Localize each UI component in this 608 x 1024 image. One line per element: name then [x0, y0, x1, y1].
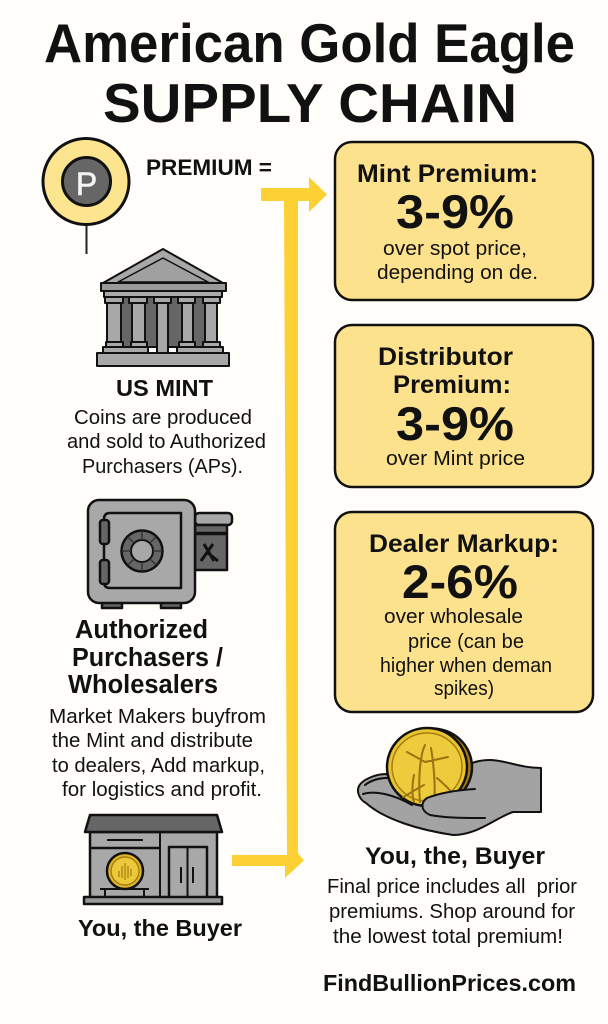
text: final price note: the lowest total premium!	[333, 925, 563, 948]
text: wholesalers description	[49, 705, 266, 801]
label: You, the Buyer (left): You, the Buyer	[78, 915, 242, 941]
label: You, the Buyer (right): You, the, Buyer	[365, 843, 545, 870]
icon: storefront with coin	[84, 815, 222, 904]
panel: mint premium: depending on de.	[377, 261, 538, 284]
panel: distributor premium: Premium:	[393, 371, 511, 399]
text: wholesalers description: the Mint and distribute	[52, 729, 253, 752]
text: US Mint description	[67, 406, 266, 478]
icon: hand holding gold coin	[358, 728, 541, 835]
arrow: top connector to mint premium	[261, 177, 327, 860]
panel: dealer markup: Dealer Markup:	[369, 530, 559, 558]
panel: mint premium: 3-9%	[396, 185, 514, 238]
text: wholesalers description: for logistics and profit.	[62, 778, 262, 801]
panel: mint premium: Mint Premium:	[357, 160, 538, 188]
premium label: PREMIUM =	[146, 155, 272, 180]
heading: US Mint: US MINT	[116, 375, 213, 401]
panel: dealer markup	[335, 512, 593, 712]
text: US Mint description: Coins are produced	[74, 406, 252, 429]
icon: premium P badge: P	[76, 166, 97, 202]
heading: Authorized Purchasers / Wholesalers	[68, 616, 223, 699]
text: final price note: premiums. Shop around for	[329, 900, 575, 923]
text: final price note: Final price includes all prior	[327, 875, 577, 898]
panel: dealer markup: price (can be	[408, 630, 524, 653]
panel: dealer markup: over wholesale	[384, 605, 523, 628]
panel: dealer markup: higher when deman	[380, 654, 552, 677]
panel: mint premium: over spot price,	[383, 237, 527, 260]
panel: distributor premium	[335, 325, 593, 487]
text: US Mint description: Purchasers (APs).	[82, 455, 243, 478]
text: wholesalers description: to dealers, Add markup,	[52, 754, 265, 777]
text: final price note	[327, 875, 577, 948]
panel: distributor premium: Distributor	[378, 343, 513, 371]
panel: distributor premium: 3-9%	[396, 397, 514, 450]
icon: vault safe	[88, 500, 232, 608]
title	[44, 12, 575, 134]
icon: US Mint building	[97, 249, 229, 366]
panel: dealer markup: 2-6%	[402, 555, 518, 608]
footer: website: FindBullionPrices.com	[323, 970, 576, 996]
text: wholesalers description: Market Makers buyfrom	[49, 705, 266, 728]
heading: Authorized Purchasers / Wholesalers: Wholesalers	[68, 671, 218, 699]
panel: mint premium	[335, 142, 593, 300]
title: American Gold Eagle	[44, 12, 575, 74]
title: SUPPLY CHAIN	[103, 72, 517, 134]
text: US Mint description: and sold to Authorized	[67, 430, 266, 453]
panel: distributor premium: over Mint price	[386, 447, 525, 470]
icon: premium P badge	[43, 138, 129, 254]
arrow: bottom connector to buyer	[232, 840, 304, 878]
heading: Authorized Purchasers / Wholesalers: Authorized	[75, 616, 208, 644]
panel: dealer markup: spikes)	[434, 677, 494, 700]
heading: Authorized Purchasers / Wholesalers: Purchasers /	[72, 644, 223, 672]
